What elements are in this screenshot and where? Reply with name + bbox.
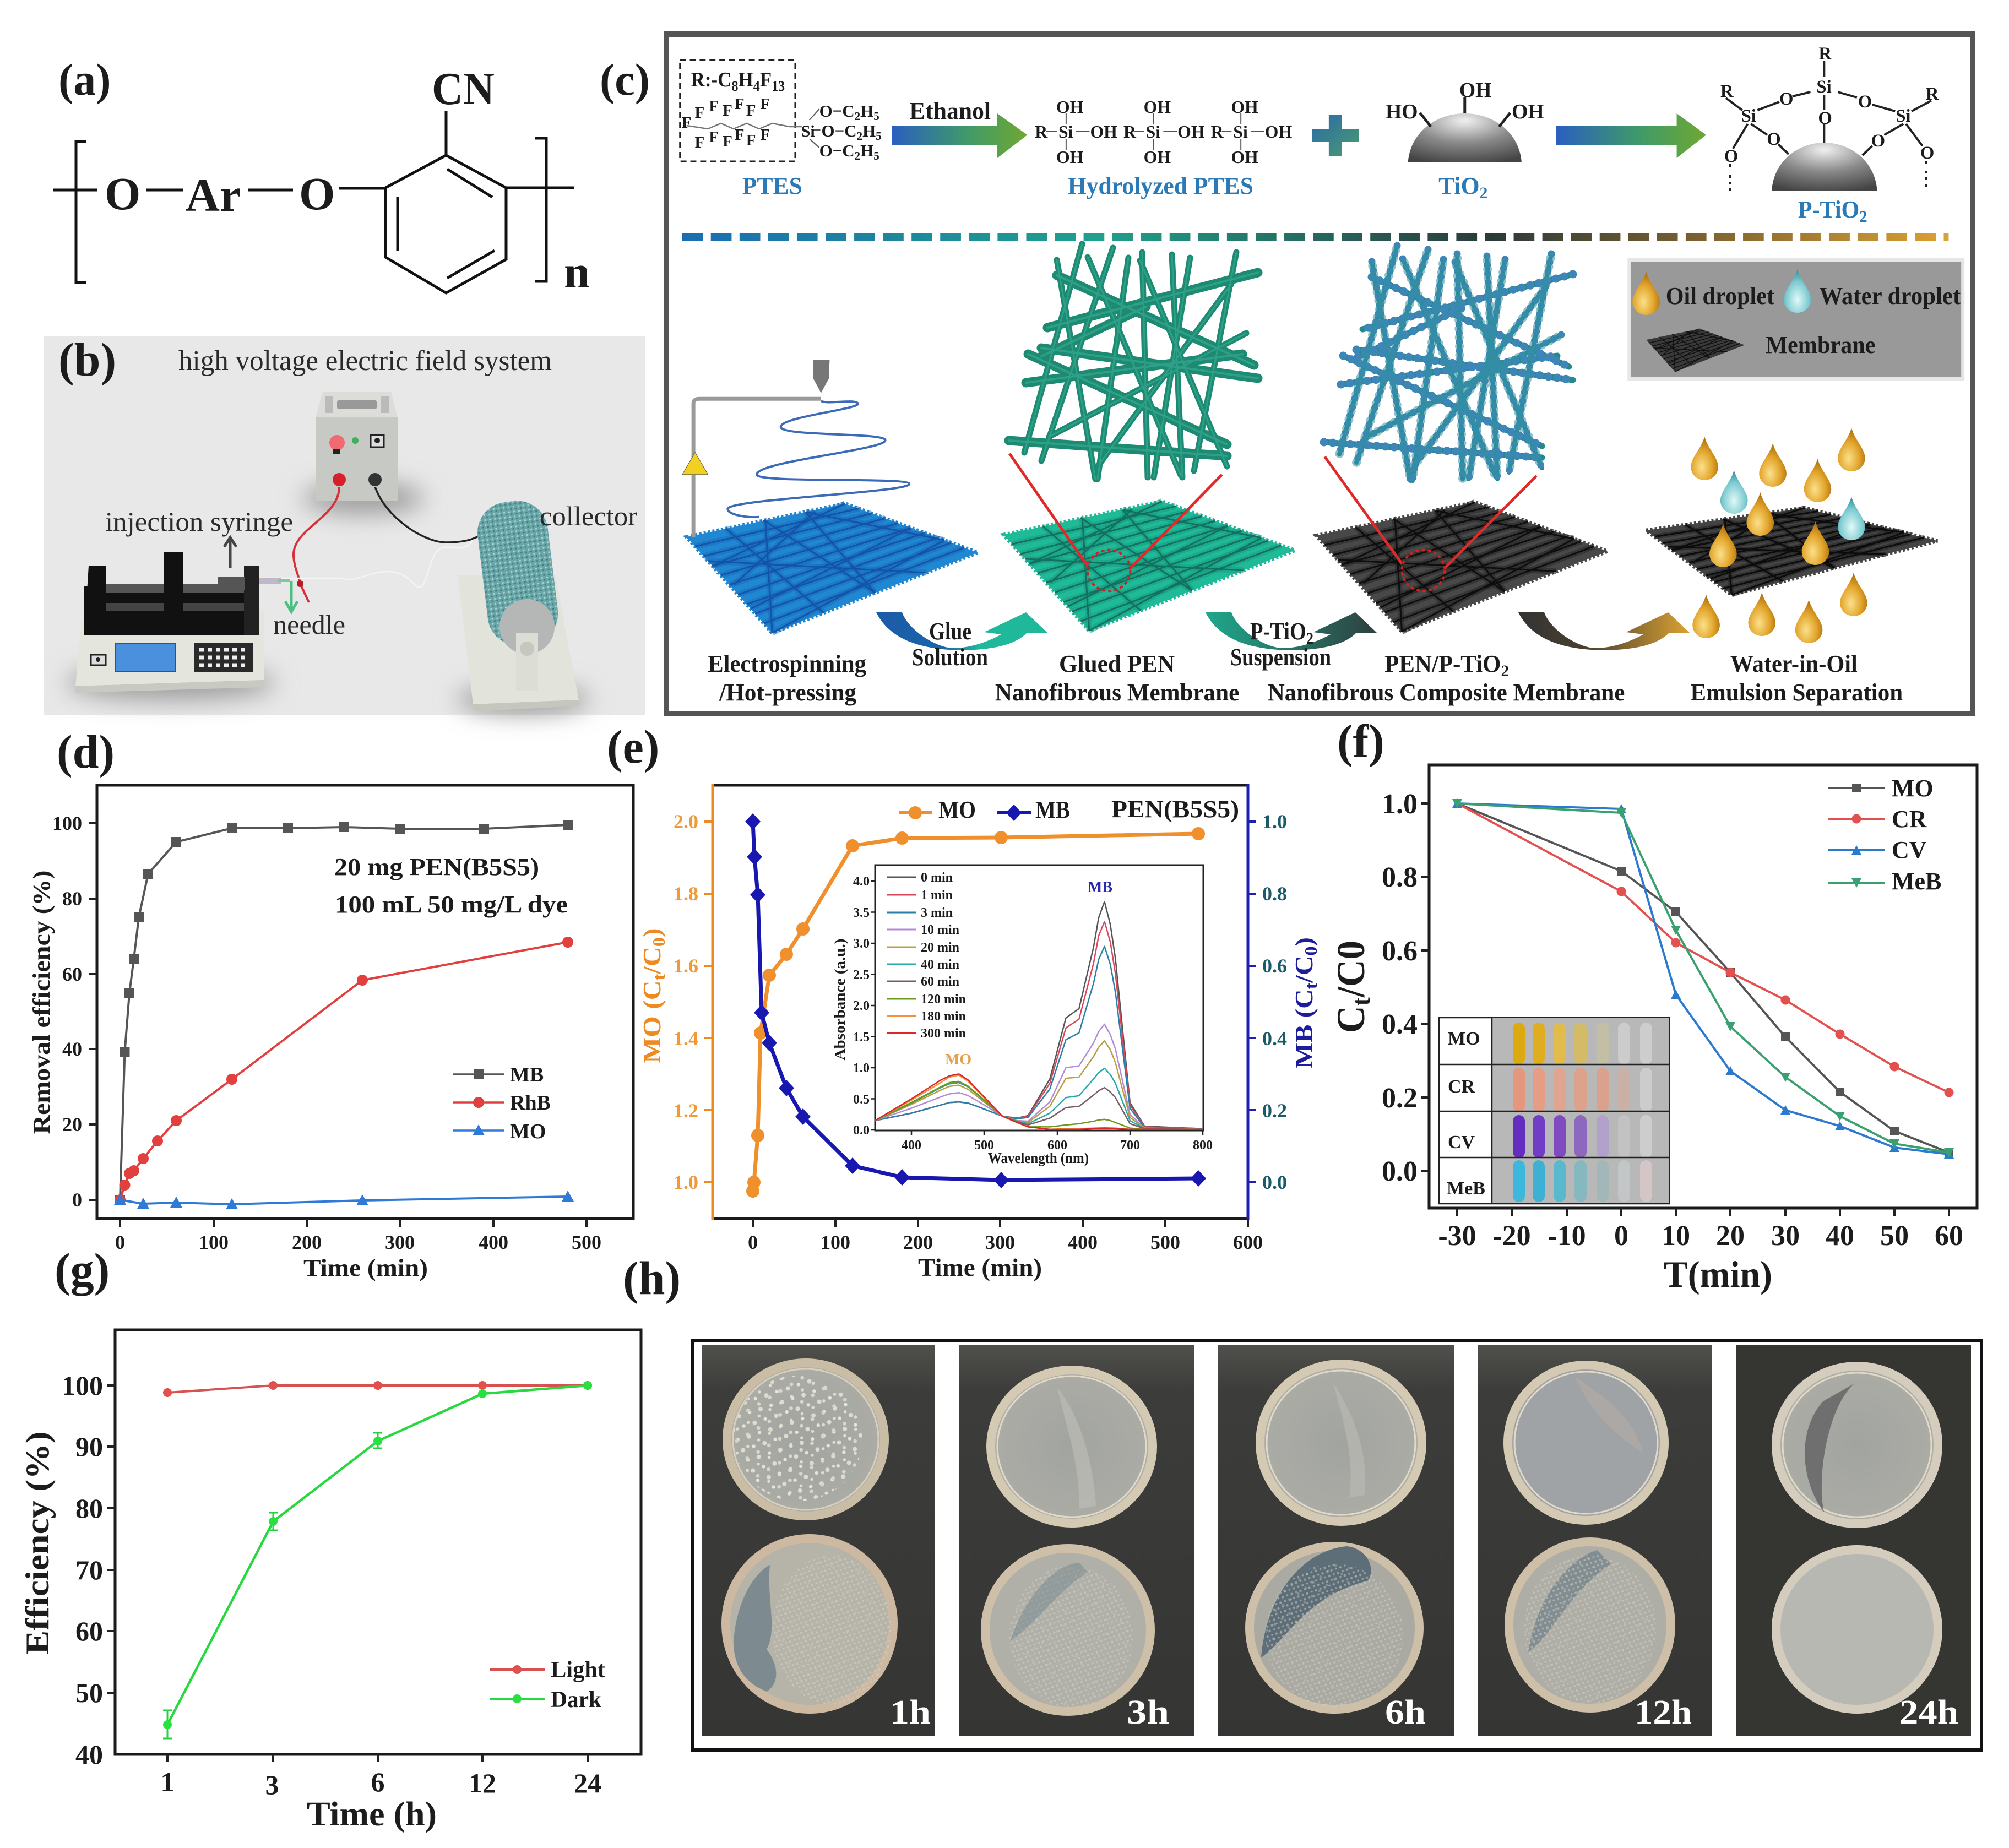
inset: absorbance spectra: 500 xyxy=(974,1138,994,1153)
time labels: 12h xyxy=(1635,1694,1692,1731)
caption: P-TiO2: 2 xyxy=(1859,208,1867,226)
arrow captions: Solution xyxy=(912,644,988,671)
step captions: PEN/P-TiO xyxy=(1384,651,1503,677)
chart (e): MO and MB kinetics: ) xyxy=(638,928,666,937)
step captions: Nanofibrous Membrane xyxy=(995,680,1239,706)
hydrolyzed PTES molecules: R xyxy=(1123,122,1137,142)
series: MO xyxy=(1457,803,1949,1153)
series: MB xyxy=(120,825,568,1200)
chart (g): antibacterial efficiency: 40 xyxy=(75,1739,103,1770)
arrow captions: Glue xyxy=(929,618,971,645)
arrow: Ethanol xyxy=(892,98,1027,158)
inset: absorbance spectra: 0 min xyxy=(921,871,953,885)
hydrolyzed PTES molecules: OH xyxy=(1144,97,1171,117)
inset: cuvette photos: CR xyxy=(1448,1077,1475,1097)
inset: absorbance spectra: 2.5 xyxy=(853,968,870,982)
inset: absorbance spectra: 40 min xyxy=(921,958,959,972)
chart (d): removal efficiency xyxy=(28,785,633,1281)
legend: Light xyxy=(551,1657,605,1683)
hydrolyzed PTES molecules: OH xyxy=(1056,97,1084,117)
chart (f): dye degradation: 0.4 xyxy=(1382,1009,1418,1040)
legend xyxy=(1828,775,1941,895)
time labels: 3h xyxy=(1127,1694,1169,1731)
top row: PTES molecule: F xyxy=(709,97,719,115)
chart (e): MO and MB kinetics: 400 xyxy=(1068,1231,1098,1253)
wires xyxy=(259,487,480,602)
chart (e): MO and MB kinetics: 600 xyxy=(1233,1231,1263,1253)
chart (g): antibacterial efficiency: Time (h) xyxy=(307,1796,437,1833)
inset: absorbance spectra: 180 min xyxy=(921,1009,966,1024)
hydrolyzed PTES molecules: OH xyxy=(1056,148,1084,167)
inset: absorbance spectra: 4.0 xyxy=(853,874,870,889)
legend xyxy=(899,796,1239,823)
hydrolyzed PTES molecules: OH xyxy=(1177,122,1205,142)
legend: RhB xyxy=(510,1091,551,1115)
top row: PTES molecule: F xyxy=(695,134,704,151)
top row: PTES molecule: Si xyxy=(801,122,815,140)
TiO2 particle: HO xyxy=(1386,100,1418,123)
top row: PTES molecule: O−C xyxy=(819,101,854,121)
chart (f): dye degradation: t xyxy=(1346,997,1376,1005)
top row: PTES molecule: F xyxy=(760,68,772,91)
chart (f): dye degradation: 0.6 xyxy=(1382,936,1418,967)
top row: PTES molecule: O−C xyxy=(822,121,856,140)
hydrolyzed PTES molecules: R xyxy=(1035,122,1048,142)
inset: absorbance spectra: 0.0 xyxy=(853,1123,870,1138)
chart (f): dye degradation: 20 xyxy=(1716,1220,1745,1252)
chart (e): MO and MB kinetics: 1.6 xyxy=(674,955,698,977)
power supply box xyxy=(316,392,398,501)
chart (f): dye degradation: /C0 xyxy=(1329,941,1373,998)
P-TiO2 structure: O xyxy=(1871,131,1885,151)
separation membrane xyxy=(1646,508,1937,595)
chart (f): dye degradation: 60 xyxy=(1935,1220,1963,1252)
chart (e): MO and MB kinetics: 500 xyxy=(1150,1231,1180,1253)
step captions: Glued PEN xyxy=(1059,651,1175,677)
chart (g): antibacterial efficiency: 80 xyxy=(75,1493,103,1524)
water droplets xyxy=(1720,470,1865,540)
top row: PTES molecule: F xyxy=(746,132,756,149)
top row: PTES molecule: 5 xyxy=(876,129,882,143)
legend: CV xyxy=(1892,836,1927,863)
P-TiO2 structure: R xyxy=(1926,84,1940,104)
P-TiO2 structure xyxy=(1720,44,1940,193)
series: MO xyxy=(120,1197,568,1204)
label: injection syringe: injection syringe xyxy=(105,506,293,537)
chart (g): antibacterial efficiency: 60 xyxy=(75,1616,103,1646)
chart (g): antibacterial efficiency: 1 xyxy=(161,1767,174,1797)
top row: PTES molecule: F xyxy=(682,114,691,132)
chart (e): MO and MB kinetics: 0.2 xyxy=(1262,1100,1287,1122)
chart (f): dye degradation: 0.8 xyxy=(1382,862,1418,893)
legend: MO xyxy=(510,1120,546,1143)
P-TiO2 structure: O xyxy=(1920,143,1934,163)
top row: PTES molecule: O−C xyxy=(819,141,854,160)
panel (c) frame xyxy=(666,34,1973,714)
inset: absorbance spectra: 800 xyxy=(1193,1138,1213,1153)
legend: MO xyxy=(1892,775,1934,802)
chart (e): MO and MB kinetics: 0.0 xyxy=(1262,1171,1287,1193)
chart (e): MO and MB kinetics: 0.6 xyxy=(1262,955,1287,977)
panel (h): petri dish photographs xyxy=(693,1341,1981,1750)
chemical structure: polymer repeat unit: O xyxy=(105,169,140,220)
inset: cuvette photos: CV xyxy=(1448,1132,1475,1153)
chart (e): MO and MB kinetics xyxy=(638,784,1321,1281)
hydrolyzed PTES molecules: Si xyxy=(1146,122,1160,142)
top row: PTES molecule: H xyxy=(862,121,876,140)
series: RhB xyxy=(120,942,568,1200)
arrow: to P-TiO2 xyxy=(1556,113,1706,158)
time labels xyxy=(890,1694,1958,1731)
legend: Dark xyxy=(551,1687,602,1713)
top row: PTES molecule: R:-C xyxy=(691,68,735,91)
top row: PTES molecule: 5 xyxy=(873,149,879,162)
chart (e): MO and MB kinetics: 1.0 xyxy=(1262,811,1287,833)
arrow captions: Suspension xyxy=(1230,644,1331,671)
series: MB xyxy=(753,822,1198,1180)
red needle clip xyxy=(297,580,303,587)
chart (e): MO and MB kinetics: 0 xyxy=(748,1231,758,1253)
chart (f): dye degradation: 30 xyxy=(1771,1220,1800,1252)
top row: PTES molecule: F xyxy=(723,133,732,150)
top row: PTES molecule: H xyxy=(860,101,873,121)
step captions: Nanofibrous Composite Membrane xyxy=(1268,680,1625,706)
hydrolyzed PTES molecules: OH xyxy=(1265,122,1292,142)
chart (d): removal efficiency: 80 xyxy=(62,888,82,910)
panel label (g): (g) xyxy=(55,1243,110,1296)
inset: absorbance spectra: 700 xyxy=(1120,1138,1140,1153)
legend: MB xyxy=(1035,796,1070,823)
chart (d): removal efficiency: 0 xyxy=(72,1189,82,1211)
chart (g): antibacterial efficiency: 3 xyxy=(265,1769,279,1800)
chart (g): antibacterial efficiency: 90 xyxy=(75,1431,103,1462)
chemical structure: polymer repeat unit: Ar xyxy=(186,169,241,221)
P-TiO2 structure: Si xyxy=(1816,77,1832,97)
chart (e): MO and MB kinetics: MO (C xyxy=(638,986,666,1063)
hydrolyzed PTES molecules xyxy=(1035,97,1292,167)
series: MeB xyxy=(1457,803,1949,1153)
legend: CR xyxy=(1892,806,1927,833)
plus sign xyxy=(1312,115,1359,156)
inset: absorbance spectra: MB xyxy=(1088,879,1112,896)
panel label (f): (f) xyxy=(1337,715,1384,768)
top row: PTES molecule: H xyxy=(738,68,753,91)
chart (d): removal efficiency: Time (min) xyxy=(303,1254,428,1281)
chart (f): dye degradation: 50 xyxy=(1880,1220,1909,1252)
hydrolyzed PTES molecules: OH xyxy=(1231,97,1258,117)
inset: absorbance spectra: 600 xyxy=(1047,1138,1067,1153)
legend: MeB xyxy=(1892,868,1941,895)
arrow captions xyxy=(912,618,1331,671)
top row: PTES molecule: F xyxy=(723,102,732,119)
hydrolyzed PTES molecules: Si xyxy=(1233,122,1248,142)
chart (e): MO and MB kinetics: t xyxy=(649,974,669,980)
chart (e): MO and MB kinetics: 0 xyxy=(1301,946,1321,956)
chart (e): MO and MB kinetics: 100 xyxy=(821,1231,850,1253)
time labels: 1h xyxy=(890,1694,931,1731)
chart (e): MO and MB kinetics: 0.4 xyxy=(1262,1028,1287,1050)
arrow captions: 2 xyxy=(1306,629,1313,648)
P-TiO2 structure: R xyxy=(1818,44,1832,64)
chemical structure: polymer repeat unit xyxy=(53,63,590,298)
panel (c) drawn content xyxy=(680,44,1963,706)
chart (g): antibacterial efficiency: 70 xyxy=(75,1555,103,1585)
dish 3h xyxy=(985,1370,1153,1711)
chart (e): MO and MB kinetics: ) xyxy=(1290,937,1318,946)
dish 1h xyxy=(726,1363,893,1709)
top row: PTES molecule: 2 xyxy=(855,110,860,123)
TiO2 particle: OH xyxy=(1459,79,1491,102)
inset: cuvette photos: MO xyxy=(1448,1029,1480,1049)
caption: TiO2: TiO xyxy=(1438,173,1480,199)
hydrolyzed PTES molecules: OH xyxy=(1231,148,1258,167)
label: needle: needle xyxy=(273,609,345,640)
panel label (h): (h) xyxy=(623,1252,681,1305)
chart (e): MO and MB kinetics: Time (min) xyxy=(918,1253,1042,1281)
top row: PTES molecule: 4 xyxy=(753,78,760,94)
inset: absorbance spectra: 3.5 xyxy=(853,906,870,920)
P-TiO2 structure: O xyxy=(1767,129,1781,149)
inset: absorbance spectra: MO xyxy=(945,1051,971,1068)
chart (f): dye degradation: 1.0 xyxy=(1382,789,1418,820)
TiO2 particle: OH xyxy=(1512,100,1544,123)
chart (e): MO and MB kinetics: 1.2 xyxy=(674,1100,698,1122)
chart (d): removal efficiency: Removal efficiency (%) xyxy=(28,871,55,1134)
chart (d): removal efficiency: 20 xyxy=(62,1113,82,1135)
caption: PTES: PTES xyxy=(742,173,802,199)
chart (f): dye degradation: 0.2 xyxy=(1382,1083,1418,1114)
chemical structure: polymer repeat unit: CN xyxy=(432,63,495,115)
inset: absorbance spectra: 3 min xyxy=(921,906,953,920)
top row: PTES molecule: F xyxy=(735,95,745,113)
P-TiO2 structure: Si xyxy=(1896,106,1911,126)
caption: Hydrolyzed PTES: Hydrolyzed PTES xyxy=(1068,173,1253,199)
hydrolyzed PTES molecules: OH xyxy=(1144,148,1171,167)
legend box xyxy=(1629,260,1963,379)
chart (e): MO and MB kinetics: t xyxy=(1301,982,1321,989)
legend box: Oil droplet xyxy=(1666,283,1774,309)
inset: cuvette photos xyxy=(1439,1018,1669,1204)
legend: MB xyxy=(510,1063,544,1086)
dish 6h xyxy=(1250,1364,1422,1709)
chart (d): removal efficiency: 100 mL 50 mg/L dye xyxy=(335,891,568,918)
chart (e): MO and MB kinetics: 0 xyxy=(649,937,669,947)
label (b): (b) xyxy=(58,333,116,386)
chart (g): antibacterial efficiency xyxy=(19,1330,641,1833)
panel label (e): (e) xyxy=(607,720,659,773)
chart (d): removal efficiency: 100 xyxy=(52,812,82,834)
step captions xyxy=(708,651,1903,706)
legend: PEN(B5S5) xyxy=(1111,796,1239,823)
chart (d): removal efficiency: 40 xyxy=(62,1038,82,1060)
chart (e): MO and MB kinetics: /C xyxy=(1290,956,1318,983)
P-TiO2 structure: Si xyxy=(1741,106,1756,126)
chart (e): MO and MB kinetics: 1.4 xyxy=(674,1028,698,1050)
caption: P-TiO2: P-TiO xyxy=(1798,197,1861,223)
top row: PTES molecule: 2 xyxy=(857,129,862,143)
chart (d): removal efficiency: 300 xyxy=(385,1231,415,1253)
inset: absorbance spectra: 3.0 xyxy=(853,937,870,951)
time labels: 6h xyxy=(1385,1694,1426,1731)
series: CV xyxy=(1457,803,1949,1154)
dish 12h xyxy=(1508,1365,1671,1708)
inset: absorbance spectra: 20 min xyxy=(921,941,959,955)
curved arrow: P-TiO2 suspension xyxy=(1206,612,1377,650)
top row: PTES molecule: 5 xyxy=(873,110,879,123)
arrow captions: P-TiO xyxy=(1250,618,1315,645)
collector drum xyxy=(458,497,579,711)
chemical structure: polymer repeat unit: O xyxy=(299,169,335,220)
label: collector: collector xyxy=(540,501,637,531)
step captions: Water-in-Oil xyxy=(1730,651,1858,677)
panel label (a): (a) xyxy=(58,55,111,105)
composite membrane with zoom lines xyxy=(1316,456,1608,632)
chart (e): MO and MB kinetics: 2.0 xyxy=(674,811,698,833)
PEN/P-TiO2 beaded fibre mesh xyxy=(1324,246,1573,481)
hydrolyzed PTES molecules: Si xyxy=(1058,122,1073,142)
chart (f): dye degradation: -10 xyxy=(1548,1220,1586,1252)
step captions: 2 xyxy=(1501,662,1509,680)
chart (d): removal efficiency: 60 xyxy=(62,963,82,985)
P-TiO2 structure: O xyxy=(1724,146,1738,166)
top row: PTES molecule: F xyxy=(709,128,719,146)
panel label (d): (d) xyxy=(57,725,115,778)
chart (d): removal efficiency: 400 xyxy=(479,1231,508,1253)
syringe pump xyxy=(75,552,290,693)
legend box: Membrane xyxy=(1766,332,1876,358)
curved arrow: separation xyxy=(1518,612,1690,650)
panel (b): electrospinning set-up xyxy=(44,333,645,715)
step captions: Electrospinning xyxy=(708,651,866,677)
inset: absorbance spectra: 60 min xyxy=(921,975,959,989)
top row: PTES molecule: H xyxy=(860,141,873,160)
hydrolyzed PTES molecules: R xyxy=(1211,122,1224,142)
legend: MO xyxy=(938,796,976,823)
legend box: Water droplet xyxy=(1819,283,1961,309)
chart (e): MO and MB kinetics: 300 xyxy=(985,1231,1015,1253)
dish 24h xyxy=(1776,1366,1938,1709)
chart (f): dye degradation: 40 xyxy=(1826,1220,1854,1252)
glued PEN membrane with zoom lines xyxy=(1003,454,1295,631)
inset: absorbance spectra: 400 xyxy=(902,1138,921,1153)
panel label (c): (c) xyxy=(600,55,650,105)
chart (d): removal efficiency: 500 xyxy=(572,1231,601,1253)
inset: absorbance spectra: 10 min xyxy=(921,923,959,937)
PEN fibre mesh xyxy=(1009,244,1258,479)
curved arrow: glue solution xyxy=(876,612,1047,650)
arrow: to needle xyxy=(285,581,297,612)
chart (g): antibacterial efficiency: 24 xyxy=(574,1768,601,1798)
arrow: Ethanol: Ethanol xyxy=(909,98,991,124)
chart (f): dye degradation xyxy=(1329,765,1977,1295)
chart (g): antibacterial efficiency: 100 xyxy=(62,1370,103,1401)
chart (f): dye degradation: T(min) xyxy=(1664,1253,1772,1295)
inset: absorbance spectra: 1.0 xyxy=(853,1061,870,1075)
inset: absorbance spectra: 2.0 xyxy=(853,999,870,1013)
P-TiO2 structure: O xyxy=(1779,89,1793,109)
legend xyxy=(490,1657,605,1713)
top row: PTES molecule: F xyxy=(761,126,770,144)
chart (e): MO and MB kinetics: MB (C xyxy=(1290,994,1318,1068)
inset: absorbance spectra: 1.5 xyxy=(853,1030,870,1045)
time labels: 24h xyxy=(1899,1694,1958,1731)
inset: absorbance spectra: Wavelength (nm) xyxy=(988,1150,1089,1166)
inset: absorbance spectra: Absorbance (a.u.) xyxy=(832,938,848,1061)
chart (e): MO and MB kinetics: 1.8 xyxy=(674,883,698,905)
chart (e): MO and MB kinetics: 0.8 xyxy=(1262,883,1287,905)
P-TiO2 structure: O xyxy=(1818,108,1832,128)
shadows xyxy=(66,483,589,714)
electrospinning apparatus and blue membrane xyxy=(682,360,978,633)
chart (d): removal efficiency: 100 xyxy=(199,1231,229,1253)
chart (d): removal efficiency: 200 xyxy=(292,1231,322,1253)
chart (g): antibacterial efficiency: 6 xyxy=(371,1767,384,1797)
top row: PTES molecule: 13 xyxy=(772,78,785,94)
legend xyxy=(453,1063,551,1143)
chart (e): MO and MB kinetics: /C xyxy=(638,947,666,975)
chart (f): dye degradation: 0 xyxy=(1614,1220,1628,1252)
heading: high voltage electric field system: high voltage electric field system xyxy=(178,345,552,377)
photo columns xyxy=(702,1345,1971,1736)
chart (f): dye degradation: 0.0 xyxy=(1382,1156,1418,1187)
top row: PTES molecule: F xyxy=(761,95,770,113)
chart (f): dye degradation: 10 xyxy=(1662,1220,1690,1252)
inset: cuvette photos: MeB xyxy=(1447,1178,1485,1199)
top row: PTES molecule: F xyxy=(695,104,704,122)
chart (f): dye degradation: C xyxy=(1329,1004,1373,1033)
gradient dashed divider xyxy=(682,233,1948,241)
TiO2 particle xyxy=(1386,79,1544,162)
hydrolyzed PTES molecules: OH xyxy=(1090,122,1117,142)
inset: absorbance spectra: 1 min xyxy=(921,888,953,903)
step captions: Emulsion Separation xyxy=(1690,680,1903,706)
inset: absorbance spectra xyxy=(832,865,1213,1166)
arrow: to injection syringe xyxy=(224,537,236,568)
inset: absorbance spectra: 120 min xyxy=(921,992,966,1007)
inset: absorbance spectra: 300 min xyxy=(921,1026,966,1041)
series: Light xyxy=(167,1385,588,1393)
chart (g): antibacterial efficiency: Efficiency (%) xyxy=(19,1432,56,1654)
top row: PTES molecule xyxy=(680,60,882,162)
chart (f): dye degradation: -30 xyxy=(1438,1220,1476,1252)
top row: PTES molecule: 2 xyxy=(855,149,860,162)
series: Dark with error bars xyxy=(163,1385,588,1738)
annotation: 20 mg PEN(B5S5) xyxy=(334,854,539,880)
chemical structure: polymer repeat unit: n xyxy=(564,247,590,298)
top row: PTES molecule: F xyxy=(735,126,745,144)
inset: absorbance spectra: 0.5 xyxy=(853,1093,870,1107)
step captions: /Hot-pressing xyxy=(719,680,856,706)
caption: TiO2: 2 xyxy=(1480,184,1487,202)
top row: PTES molecule: F xyxy=(746,102,756,119)
chart (e): MO and MB kinetics: 1.0 xyxy=(674,1171,698,1193)
P-TiO2 structure: R xyxy=(1720,81,1734,101)
oil droplets xyxy=(1691,428,1867,643)
P-TiO2 structure: O xyxy=(1858,92,1872,112)
chart (e): MO and MB kinetics: 200 xyxy=(903,1231,933,1253)
top row: PTES molecule: 8 xyxy=(732,78,739,94)
chart (g): antibacterial efficiency: 12 xyxy=(469,1768,496,1798)
series: MO xyxy=(753,834,1198,1191)
chart (d): removal efficiency: 0 xyxy=(115,1231,125,1253)
chart (g): antibacterial efficiency: 50 xyxy=(75,1677,103,1708)
chart (f): dye degradation: -20 xyxy=(1492,1220,1531,1252)
series: CR xyxy=(1457,803,1949,1093)
